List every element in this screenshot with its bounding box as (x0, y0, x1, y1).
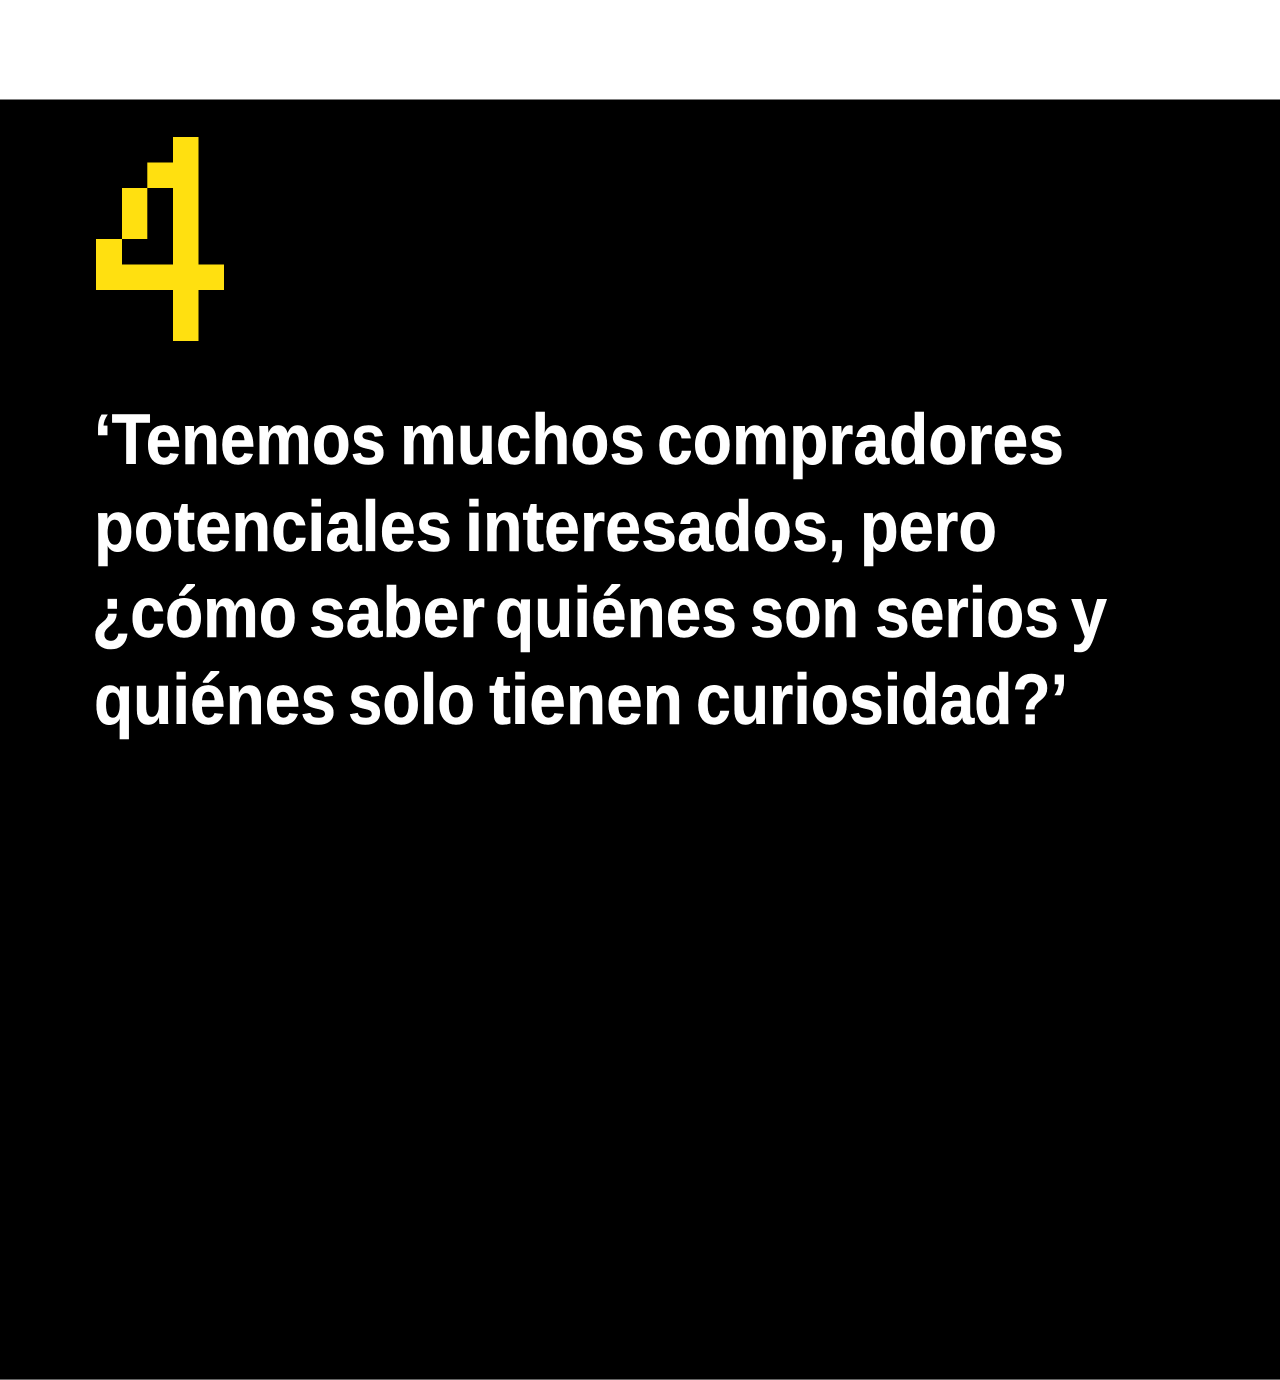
quote text: serios (875, 574, 1059, 653)
icon: pixel numeral 4 (96, 137, 224, 341)
quote text: interesados, (465, 488, 846, 567)
quote text: saber (309, 574, 485, 653)
quote text: quiénes (495, 574, 737, 653)
quote text: muchos (400, 401, 645, 480)
quote text: compradores (657, 401, 1064, 480)
quote text: quiénes (94, 661, 336, 740)
quote text: solo (348, 661, 475, 740)
quote text: ¿cómo (92, 574, 297, 653)
quote text: son (750, 574, 859, 653)
quote text: tienen (489, 661, 683, 740)
quote text: pero (860, 488, 997, 567)
quote text: y (1071, 574, 1107, 653)
quote text (92, 401, 1107, 740)
quote text: potenciales (94, 488, 452, 567)
quote text: curiosidad?’ (696, 661, 1068, 740)
quote text: ‘Tenemos (94, 401, 386, 480)
